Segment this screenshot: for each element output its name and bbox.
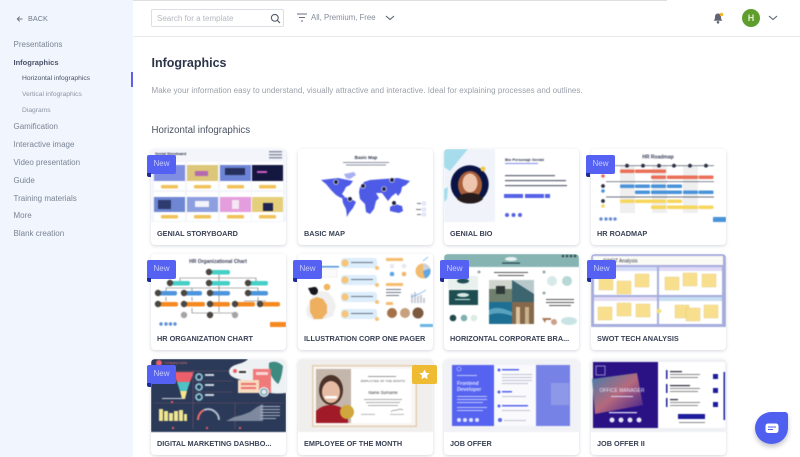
section heading: Horizontal infographics	[152, 124, 250, 136]
thumbnail: certificate: EMPLOYEE OF THE MONTH	[361, 379, 405, 383]
chat button	[755, 412, 788, 444]
card title: EMPLOYEE OF THE MONTH	[304, 438, 402, 448]
user avatar	[742, 9, 760, 27]
thumbnail: storyboard	[152, 150, 286, 222]
page description: Make your information easy to understand, visually attractive and interactive. Ideal for explaining processes and outlines.	[152, 86, 583, 95]
submenu item active: Horizontal infographics	[22, 75, 90, 82]
thumbnail: roadmap gantt: HR Roadmap	[642, 154, 674, 160]
menu item: Gamification	[14, 122, 58, 131]
thumbnail: bio portrait	[444, 149, 568, 222]
badge: new: New	[299, 264, 316, 273]
card: Job Offer	[444, 359, 579, 455]
card title: BASIC MAP	[304, 228, 345, 238]
back link	[16, 14, 48, 22]
card: Employee of the Month	[298, 359, 433, 455]
thumbnail: job offer: Frontend	[457, 381, 479, 387]
card title: HORIZONTAL CORPORATE BRA...	[450, 334, 569, 342]
thumbnail: job offer II	[591, 359, 726, 432]
submenu item: Vertical infographics	[22, 91, 82, 98]
menu item: Guide	[14, 176, 35, 185]
thumbnail: certificate	[298, 359, 433, 432]
card: Illustration Corp One Pager	[298, 254, 433, 350]
sidebar navigation	[0, 0, 133, 457]
header bar	[133, 0, 800, 36]
search box	[151, 9, 284, 27]
card: Genial Storyboard	[151, 149, 286, 245]
search box: Search for a template	[157, 14, 233, 23]
menu item: Training materials	[14, 194, 77, 203]
card title: SWOT TECH ANALYSIS	[597, 334, 679, 342]
menu item: More	[14, 211, 32, 220]
badge: new	[147, 365, 176, 384]
badge: new: New	[153, 264, 170, 273]
badge: new: New	[153, 369, 170, 378]
badge: new	[440, 260, 469, 279]
thumbnail: roadmap gantt	[598, 154, 726, 223]
thumbnail: job offer	[444, 359, 579, 432]
card title: JOB OFFER II	[597, 438, 645, 448]
badge: new: New	[593, 264, 610, 273]
badge: new	[147, 260, 176, 279]
page title: Infographics	[152, 56, 227, 70]
card: HR Roadmap	[591, 149, 726, 245]
thumbnail: world map: Basic Map	[355, 155, 378, 160]
badge: new: New	[446, 264, 462, 273]
thumbnail: SWOT board: SWOT Analysis	[603, 258, 638, 264]
card: Job Offer II	[591, 359, 726, 455]
submenu item: Diagrams	[22, 107, 51, 114]
card: Digital Marketing Dashboard	[151, 359, 286, 455]
badge: new: New	[153, 159, 170, 168]
badge: new	[586, 155, 615, 174]
card: SWOT Tech Analysis	[591, 254, 726, 350]
badge: new	[147, 155, 176, 174]
thumbnail: world map	[320, 155, 426, 218]
card title: GENIAL BIO	[450, 228, 492, 238]
active indicator	[131, 72, 133, 87]
card title: HR ORGANIZATION CHART	[157, 334, 253, 342]
thumbnail: one pager	[306, 256, 433, 328]
badge: premium star	[412, 365, 437, 384]
thumbnail: bio portrait: Bio Personaje Genial	[505, 157, 544, 162]
thumbnail: org chart	[154, 258, 286, 328]
thumbnail: corporate branding	[444, 254, 579, 326]
menu item: Blank creation	[14, 229, 64, 238]
thumbnail: job offer: Developer	[457, 387, 481, 393]
thumbnail: storyboard: Genial Storyboard	[155, 152, 186, 156]
card: Basic Map	[298, 149, 433, 245]
thumbnail: job offer II: OFFICE MANAGER	[599, 388, 645, 394]
thumbnail: SWOT board	[591, 254, 726, 328]
notification bell	[714, 12, 724, 24]
badge: new: New	[592, 159, 608, 168]
badge: new	[587, 260, 616, 279]
menu item: Video presentation	[14, 158, 80, 167]
thumbnail: dashboard: Company name	[164, 361, 187, 365]
card title: GENIAL STORYBOARD	[157, 228, 238, 238]
badge: new	[293, 260, 322, 279]
menu item active: Infographics	[14, 58, 59, 67]
card: HR Organization Chart	[151, 254, 286, 350]
card title: JOB OFFER	[450, 438, 492, 448]
plan filter: All, Premium, Free	[311, 13, 376, 22]
thumbnail: org chart: HR Organizational Chart	[189, 259, 247, 265]
card title: HR ROADMAP	[597, 228, 647, 238]
plan filter	[297, 13, 394, 22]
top browser strip	[0, 0, 667, 1]
card: Horizontal Corporate Branding	[444, 254, 579, 350]
card title: ILLUSTRATION CORP ONE PAGER	[304, 334, 425, 342]
thumbnail: certificate: Name Surname	[368, 390, 398, 395]
account chevron	[768, 16, 778, 20]
card title: DIGITAL MARKETING DASHBO...	[157, 438, 271, 448]
menu item: Interactive image	[14, 140, 74, 149]
card: Genial Bio	[444, 149, 579, 245]
menu item: Presentations	[14, 40, 62, 49]
thumbnail: dashboard	[151, 359, 286, 433]
user avatar: H	[748, 13, 754, 23]
back link: BACK	[28, 14, 48, 22]
